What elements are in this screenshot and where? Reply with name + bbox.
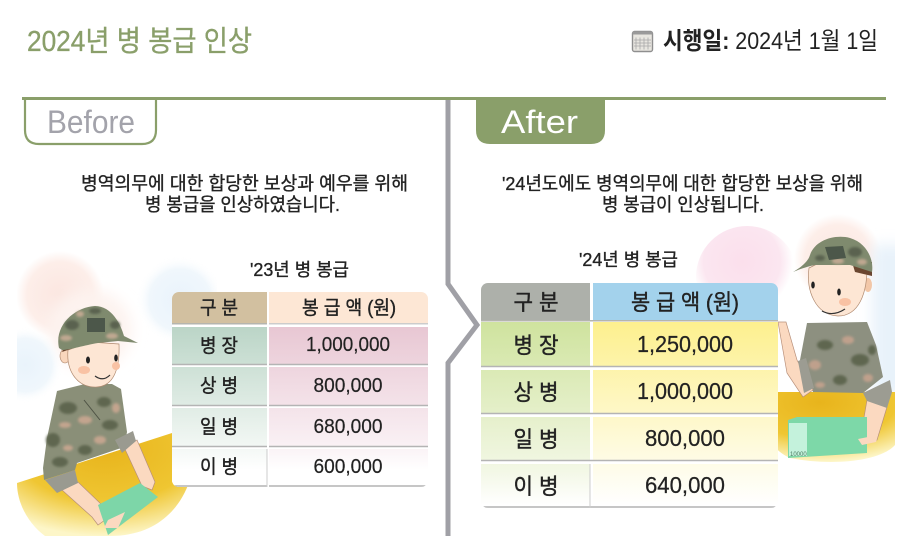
table title: '24년 병 봉급 xyxy=(579,250,678,270)
table values: 800,000 xyxy=(314,375,382,397)
illustration: soldier with cash (after) xyxy=(696,214,912,462)
table labels xyxy=(200,297,396,478)
table labels: 병 장 xyxy=(514,333,558,358)
title: 2024년 병 봉급 인상 xyxy=(27,26,252,58)
table values: 1,000,000 xyxy=(637,378,733,404)
table labels: 구 분 xyxy=(200,298,238,319)
text block: before description xyxy=(81,173,408,215)
tab: After: After xyxy=(501,104,578,140)
tab: Before xyxy=(25,100,156,144)
table values: 1,000,000 xyxy=(306,334,390,356)
text block: after description xyxy=(502,173,863,215)
table values: 600,000 xyxy=(314,456,382,478)
table title: '23년 병 봉급 xyxy=(250,260,349,280)
text block: before description: 병역의무에 대한 합당한 보상과 예우를 위해 xyxy=(81,173,408,194)
table values: 800,000 xyxy=(645,425,725,451)
table values: 1,250,000 xyxy=(637,331,733,357)
header rule xyxy=(22,97,886,100)
table values: 680,000 xyxy=(314,416,382,438)
table values: 640,000 xyxy=(645,472,725,498)
text block: after description: 병 봉급이 인상됩니다. xyxy=(602,194,764,215)
date text: 시행일: 2024년 1월 1일 xyxy=(663,28,878,55)
table: 2023 pay xyxy=(172,260,428,487)
table cells xyxy=(172,292,428,487)
table values xyxy=(306,334,390,478)
table labels: 봉 급 액 (원) xyxy=(302,297,396,319)
table labels: 일 병 xyxy=(514,427,558,452)
table values xyxy=(637,331,733,498)
tab: After xyxy=(476,100,605,144)
text block: before description: 병 봉급을 인상하였습니다. xyxy=(145,194,340,215)
table labels: 봉 급 액 (원) xyxy=(631,290,739,315)
table labels: 일 병 xyxy=(200,416,238,438)
table: 2024 pay xyxy=(481,250,778,508)
table labels: 병 장 xyxy=(200,335,238,357)
tab: Before: Before xyxy=(47,104,135,140)
illustration: soldier with cash (before) xyxy=(17,255,213,536)
table labels: 상 병 xyxy=(200,375,238,397)
table labels: 이 병 xyxy=(514,474,558,499)
table labels xyxy=(514,290,739,499)
icon: calendar xyxy=(632,32,652,52)
effective date xyxy=(632,28,878,55)
table labels: 구 분 xyxy=(514,290,558,315)
divider with chevron arrow xyxy=(448,100,477,536)
illustration: soldier with cash (after): 10000 xyxy=(790,452,807,458)
table labels: 상 병 xyxy=(514,380,558,405)
table labels: 이 병 xyxy=(200,456,238,478)
table cells xyxy=(481,283,778,508)
text block: after description: '24년도에도 병역의무에 대한 합당한 보상을 위해 xyxy=(502,173,863,194)
